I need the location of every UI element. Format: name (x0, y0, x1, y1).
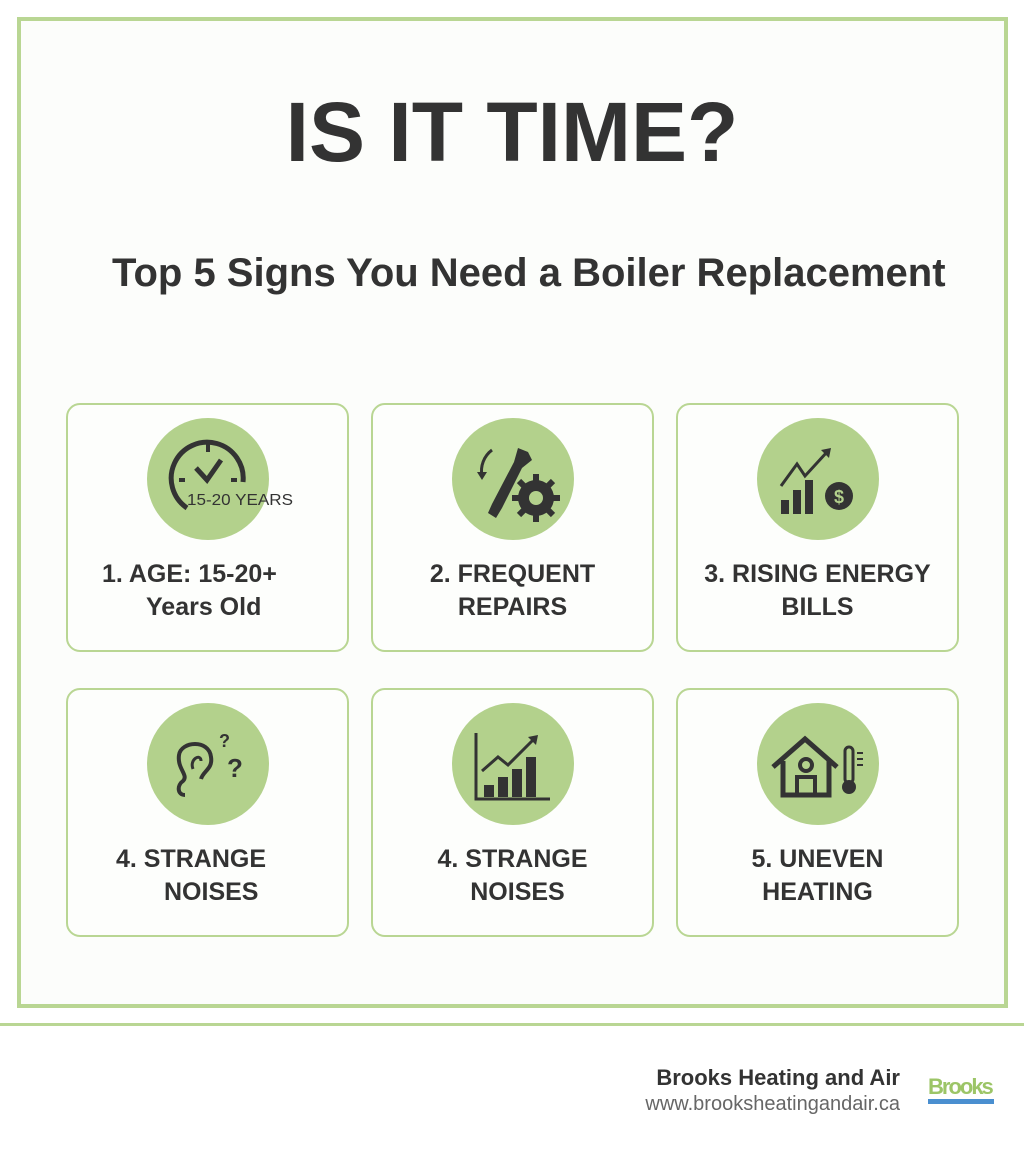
label: 4. STRANGE (116, 845, 266, 873)
icon: rising bills: $ (834, 487, 844, 507)
label: Years Old (146, 593, 261, 621)
card 2: repairs (371, 403, 654, 652)
label (704, 560, 931, 621)
icon: wrench and gear (452, 418, 574, 540)
icon: ear: ? (219, 731, 230, 751)
label (102, 560, 277, 621)
label (430, 560, 595, 621)
icon: house thermometer (757, 703, 879, 825)
label (116, 845, 266, 906)
card 6: uneven heating (676, 688, 959, 937)
footer company text (645, 1065, 900, 1115)
label (752, 845, 883, 906)
label: 4. STRANGE (437, 845, 588, 873)
label: 5. UNEVEN (752, 845, 883, 873)
icon: ear (147, 703, 269, 825)
card 1: age (66, 403, 349, 652)
label: 1. AGE: 15-20+ (102, 560, 277, 588)
label: NOISES (470, 878, 565, 906)
icon: clock: 15-20 YEARS (187, 492, 293, 509)
icon: clock (147, 418, 269, 540)
card 4: noises (66, 688, 349, 937)
label: REPAIRS (458, 593, 567, 621)
footer company text: Brooks Heating and Air (656, 1065, 900, 1090)
title: IS IT TIME? (286, 85, 738, 179)
card 3: bills (676, 403, 959, 652)
icon: ear: ? (227, 753, 243, 783)
label: NOISES (164, 878, 258, 906)
icon: bar chart (452, 703, 574, 825)
footer company text: www.brooksheatingandair.ca (645, 1093, 900, 1115)
subtitle: Top 5 Signs You Need a Boiler Replacement (112, 251, 946, 295)
logo: Brooks (928, 1074, 992, 1099)
label: BILLS (781, 593, 854, 621)
card 5: noises chart (371, 688, 654, 937)
label: 2. FREQUENT (430, 560, 595, 588)
label: HEATING (762, 878, 873, 906)
label: 3. RISING ENERGY (704, 560, 931, 588)
label (437, 845, 588, 906)
footer divider (0, 1023, 1024, 1026)
icon: rising bills (757, 418, 879, 540)
